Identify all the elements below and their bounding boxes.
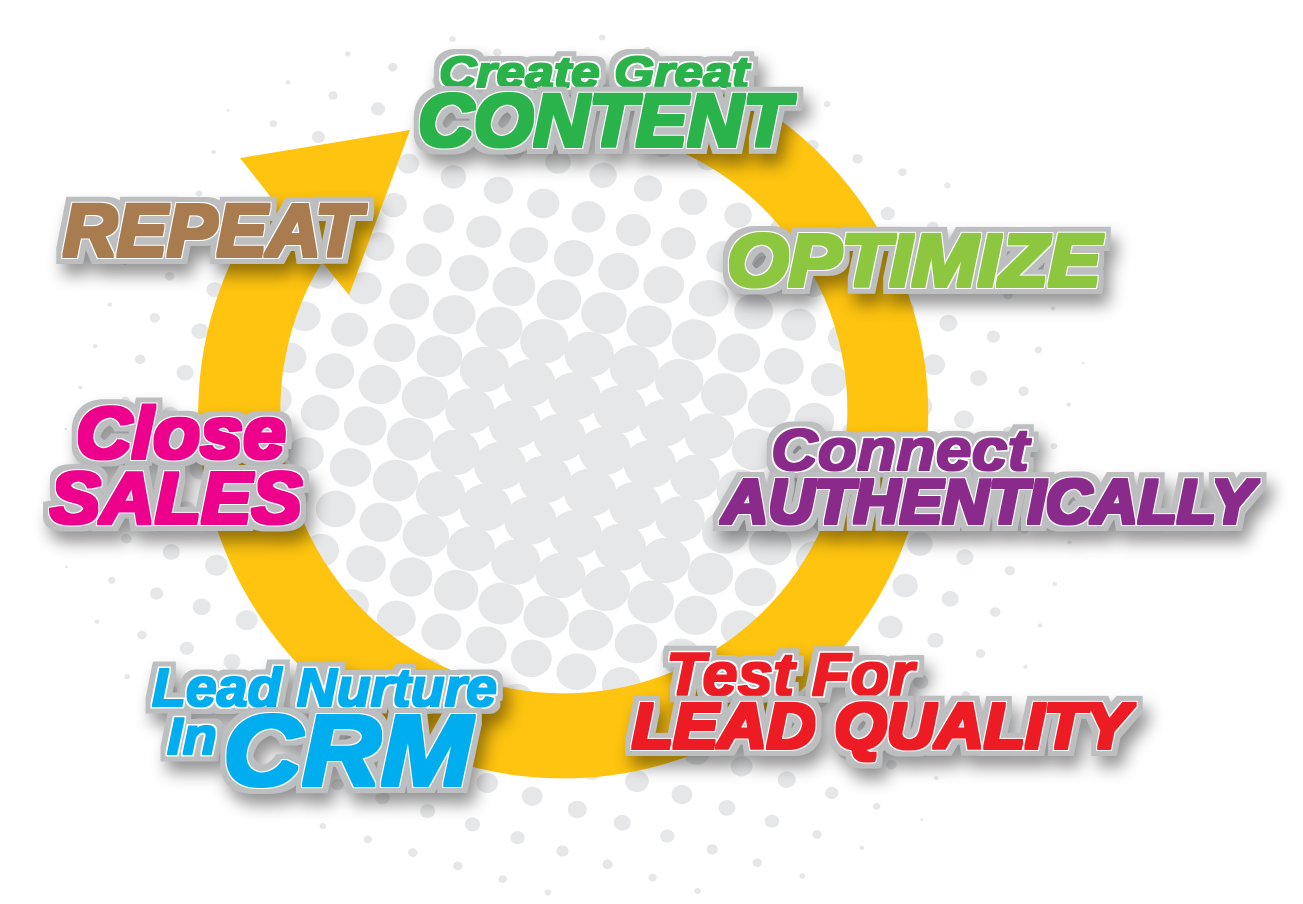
label: Lead Nurture In CRM: Lead Nurture bbox=[152, 658, 497, 718]
halftone dot background bbox=[57, 32, 1093, 898]
label: Repeat: REPEAT bbox=[63, 189, 367, 272]
label: Connect Authentically: AUTHENTICALLY bbox=[720, 468, 1260, 537]
label: Close Sales: Close bbox=[76, 394, 286, 474]
label: Test For Lead Quality: LEAD QUALITY bbox=[632, 690, 1136, 762]
label: Optimize: OPTIMIZE bbox=[727, 219, 1104, 302]
label: Connect Authentically: Connect bbox=[771, 418, 1032, 483]
label: Test For Lead Quality bbox=[632, 641, 1136, 762]
label: Connect Authentically bbox=[720, 418, 1260, 537]
label: Create Great Content: Create Great bbox=[439, 48, 752, 97]
label: Lead Nurture In CRM: CRM bbox=[223, 695, 475, 807]
label: Close Sales: SALES bbox=[50, 459, 302, 539]
label: Create Great Content: CONTENT bbox=[418, 79, 796, 162]
label: Lead Nurture In CRM: In bbox=[167, 708, 217, 766]
label: Lead Nurture In CRM bbox=[152, 658, 497, 807]
label: Test For Lead Quality: Test For bbox=[666, 641, 918, 708]
circular arrow bbox=[198, 75, 928, 778]
label: Close Sales bbox=[50, 394, 302, 539]
label: Create Great Content bbox=[418, 48, 796, 162]
